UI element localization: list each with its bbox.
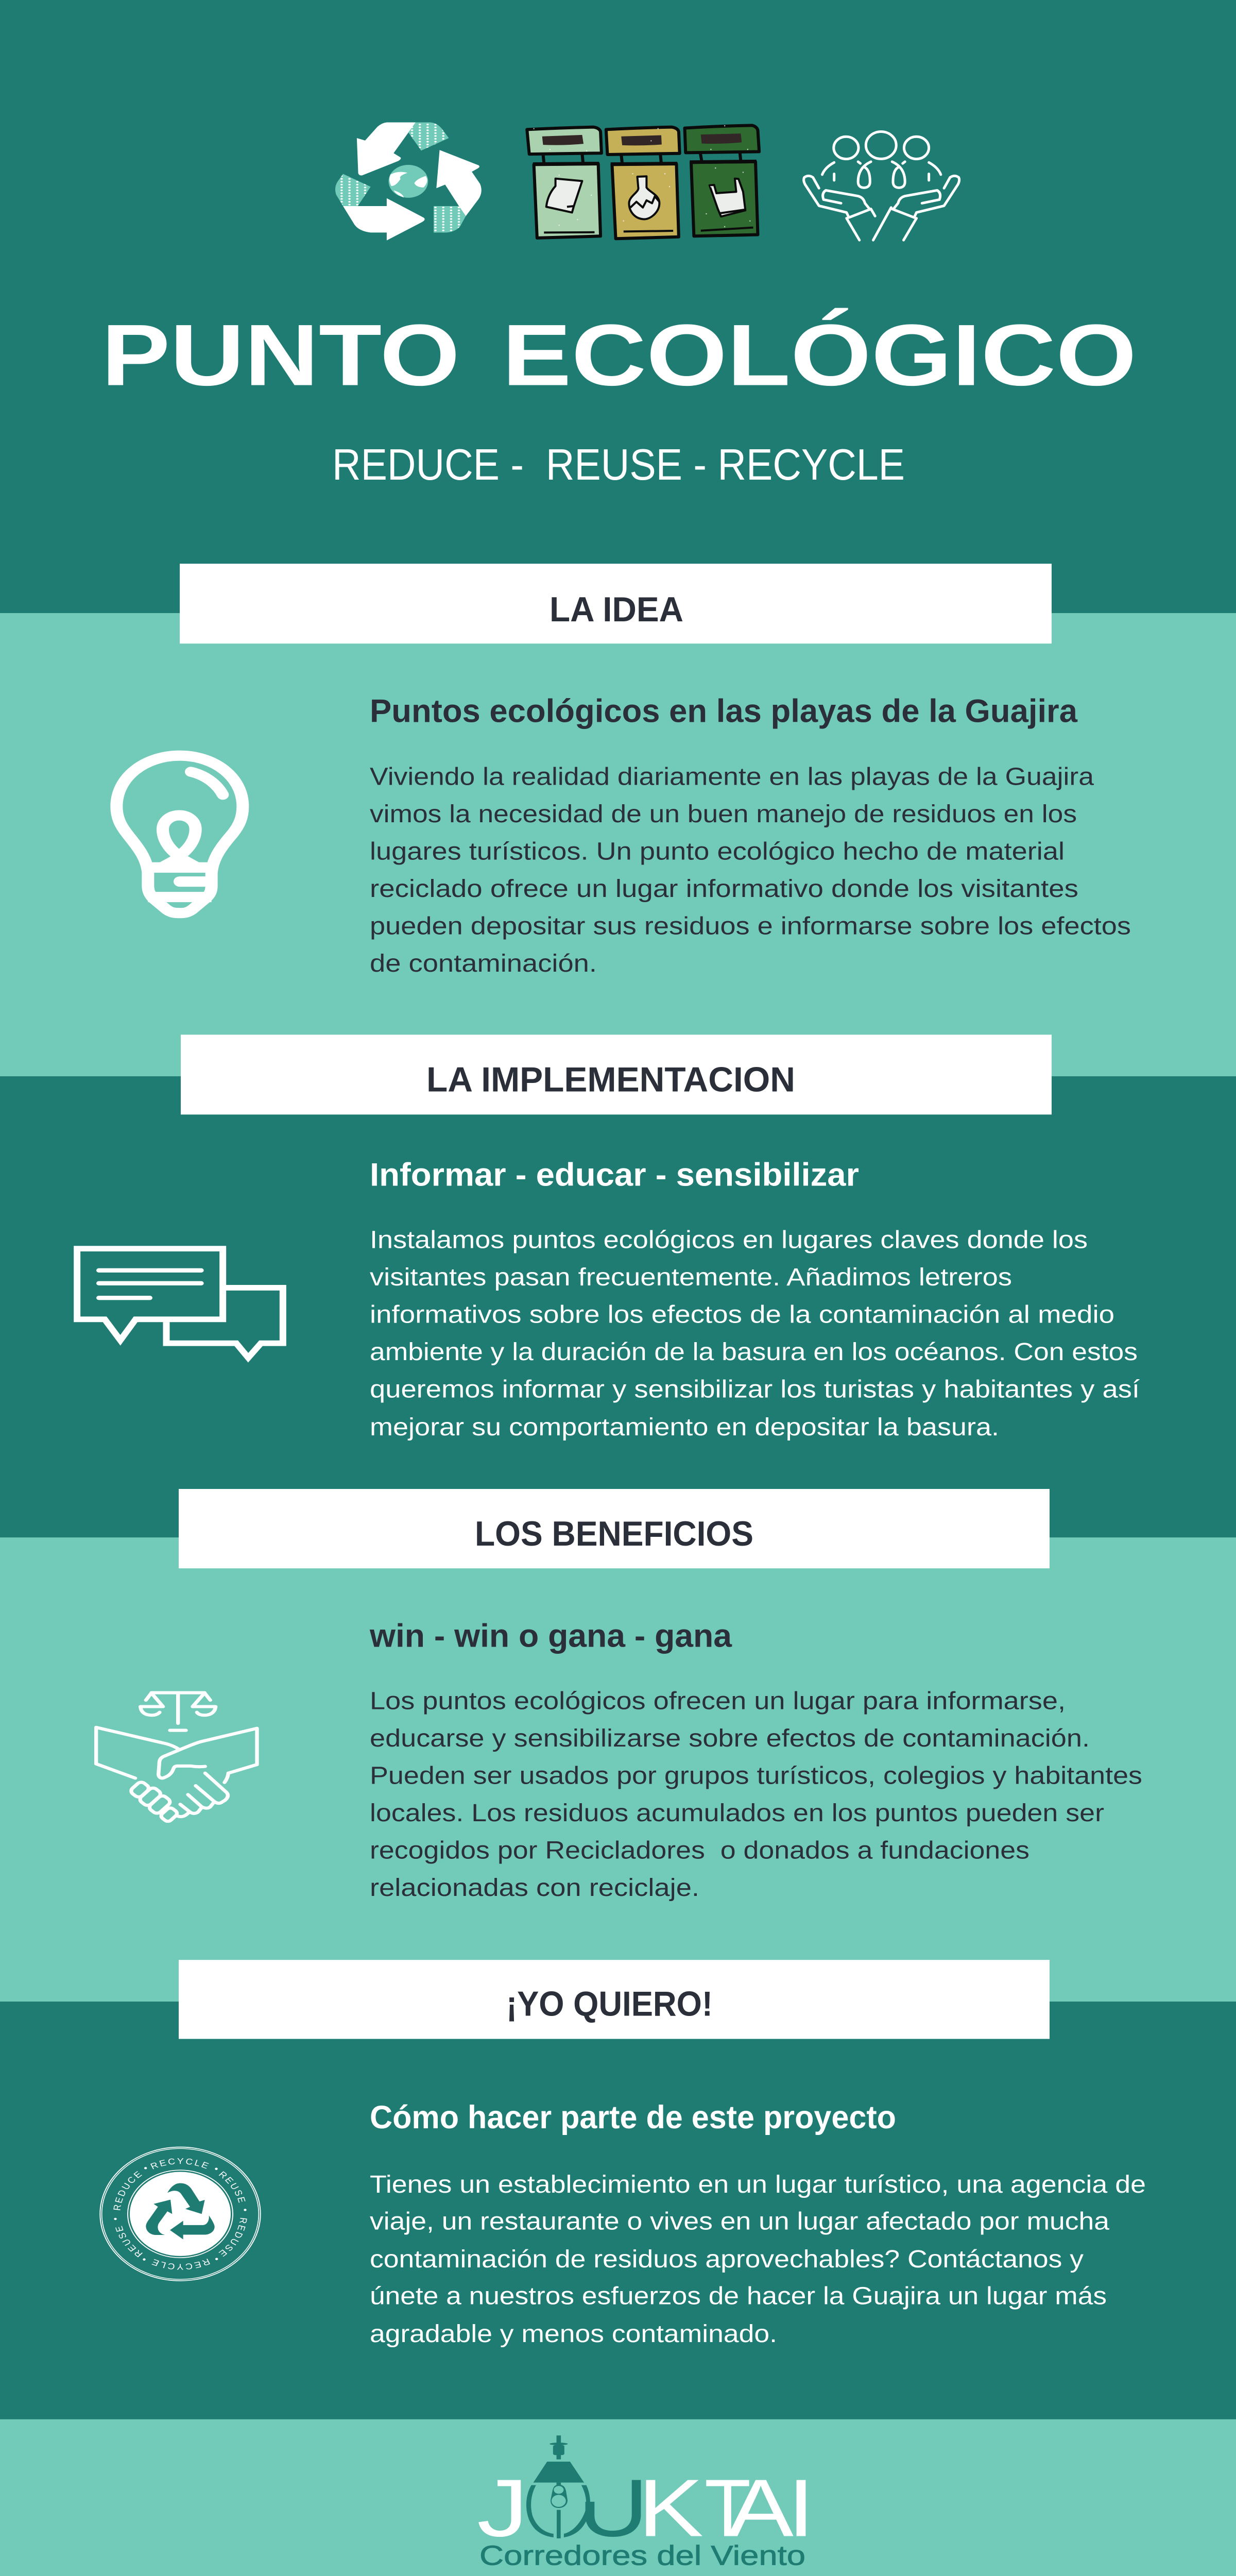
text block: relacionadas con reciclaje. [370, 1874, 699, 1902]
icon: recycle symbol with globe [335, 122, 482, 241]
panel: header [0, 0, 1236, 613]
text block [370, 2171, 1146, 2348]
logo: Jouktai Corredores del Viento: Corredores del Viento [479, 2539, 805, 2571]
heading bar: la idea [180, 564, 1052, 643]
icon: people held by hands [804, 132, 959, 240]
text block: mejorar su comportamiento en depositar la basura. [370, 1413, 999, 1441]
subheading: Puntos ecológicos en las playas de la Guajira [370, 693, 1078, 729]
text block: reciclado ofrece un lugar informativo donde los visitantes [370, 875, 1078, 903]
text block: recogidos por Recicladores o donados a fundaciones [370, 1837, 1029, 1864]
icon: recycle badge: REUSE [218, 2171, 246, 2203]
icon: recycle badge: RECYCLE [151, 2259, 210, 2270]
text block: Los puntos ecológicos ofrecen un lugar para informarse, [370, 1687, 1066, 1715]
icon: speech bubbles [77, 1249, 283, 1358]
text block: visitantes pasan frecuentemente. Añadimos letreros [370, 1263, 1012, 1291]
text block: pueden depositar sus residuos e informarse sobre los efectos [370, 912, 1131, 940]
icon: recycle badge: REDUCE [113, 2171, 142, 2210]
logo: Jouktai Corredores del Viento: T [705, 2463, 751, 2554]
panel: yo quiero [99, 1960, 1146, 2348]
text block: Pueden ser usados por grupos turísticos, colegios y habitantes [370, 1762, 1142, 1789]
logo: Jouktai Corredores del Viento: K [638, 2463, 703, 2554]
icon: lamp forming the letter O [526, 2435, 590, 2538]
panel: los beneficios [0, 1489, 1236, 2002]
panel: la idea [0, 564, 1236, 1076]
icon: recycle badge [99, 2146, 261, 2281]
heading bar: yo quiero [179, 1960, 1050, 2039]
text block [370, 763, 1131, 977]
text block: Viviendo la realidad diariamente en las playas de la Guajira [370, 763, 1094, 790]
icon: handshake and scales [96, 1693, 257, 1823]
text block: contaminación de residuos aprovechables? Contáctanos y [370, 2245, 1084, 2273]
title [101, 306, 1137, 404]
text block: únete a nuestros esfuerzos de hacer la Guajira un lugar más [370, 2282, 1107, 2310]
logo: Jouktai Corredores del Viento [477, 2435, 815, 2571]
text block: locales. Los residuos acumulados en los puntos pueden ser [370, 1799, 1104, 1827]
subheading: win - win o gana - gana [369, 1618, 732, 1654]
text block: Instalamos puntos ecológicos en lugares claves donde los [370, 1226, 1088, 1253]
heading bar: la idea: LA IDEA [550, 590, 683, 629]
logo: Jouktai Corredores del Viento: J [477, 2463, 528, 2554]
text block: ambiente y la duración de la basura en los océanos. Con estos [370, 1338, 1138, 1366]
icon: light bulb [116, 756, 243, 913]
heading bar: la implementacion: LA IMPLEMENTACION [426, 1060, 795, 1099]
text block [370, 1687, 1142, 1902]
text block: agradable y menos contaminado. [370, 2320, 777, 2348]
icon: three recycling bins [527, 125, 759, 239]
logo: Jouktai Corredores del Viento: I [787, 2463, 815, 2554]
text block: queremos informar y sensibilizar los turistas y habitantes y así [370, 1376, 1140, 1403]
subheading: Informar - educar - sensibilizar [370, 1157, 859, 1193]
logo: Jouktai Corredores del Viento: A [728, 2463, 794, 2554]
title: ECOLÓGICO [502, 306, 1137, 404]
text block: Tienes un establecimiento en un lugar turístico, una agencia de [370, 2171, 1146, 2198]
text block: informativos sobre los efectos de la contaminación al medio [370, 1301, 1114, 1328]
subheading: Cómo hacer parte de este proyecto [370, 2099, 896, 2135]
panel: la implementacion [0, 1035, 1236, 1537]
icon: recycle badge: REUSE [115, 2226, 143, 2258]
heading bar: yo quiero: ¡YO QUIERO! [506, 1985, 713, 2023]
panel: footer [0, 2419, 1236, 2576]
heading bar: los beneficios: LOS BENEFICIOS [475, 1514, 753, 1553]
heading bar: la implementacion [181, 1035, 1052, 1114]
text block: lugares turísticos. Un punto ecológico hecho de material [370, 838, 1065, 865]
heading bar: los beneficios [179, 1489, 1050, 1568]
subtitle: REDUCE - REUSE - RECYCLE [332, 440, 905, 489]
icon: recycle badge: RECYCLE [150, 2158, 209, 2169]
text block: de contaminación. [370, 950, 597, 977]
icon: recycle badge: REDUSE [218, 2217, 247, 2257]
title: PUNTO [101, 306, 460, 404]
text block: educarse y sensibilizarse sobre efectos de contaminación. [370, 1724, 1090, 1752]
text block [370, 1226, 1140, 1441]
logo: Jouktai Corredores del Viento: U [578, 2463, 648, 2554]
text block: viaje, un restaurante o vives en un lugar afectado por mucha [370, 2208, 1109, 2235]
text block: vimos la necesidad de un buen manejo de residuos en los [370, 800, 1077, 828]
